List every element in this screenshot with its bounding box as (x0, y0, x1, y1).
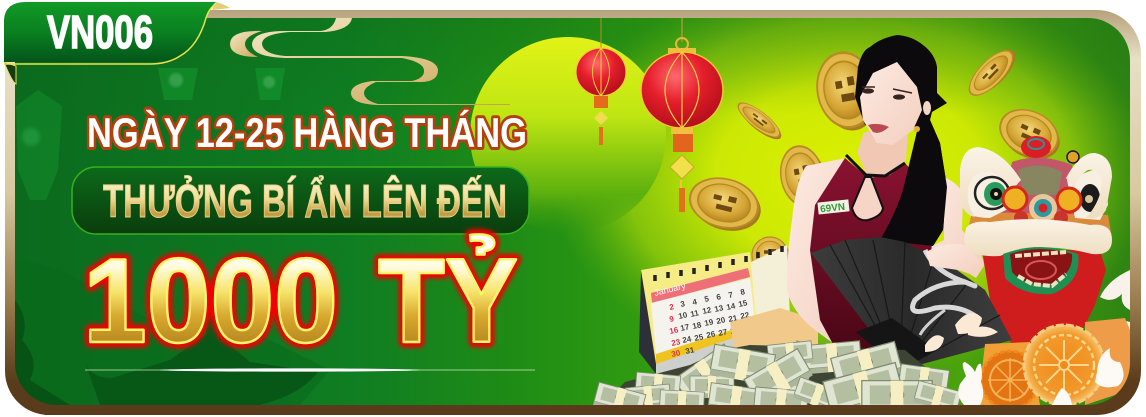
forehead floral (1000, 158, 1080, 215)
dress (810, 158, 933, 350)
left arm (787, 158, 846, 342)
desk calendar: 22 (740, 310, 751, 321)
desk calendar: January (653, 280, 687, 298)
badge 69VN (817, 199, 850, 215)
neck (857, 132, 908, 178)
right arm and hand (931, 178, 984, 278)
hair back and ponytail (855, 35, 947, 246)
gold coin top (816, 52, 866, 130)
green glowing lanterns silhouette (16, 68, 285, 200)
mooncakes (978, 318, 1130, 409)
decorative gold cloud ribbon (230, 18, 510, 105)
badge 69VN: 69VN (820, 202, 846, 215)
desk calendar: 2 (669, 302, 675, 312)
desk calendar: 15 (738, 298, 749, 309)
desk calendar: 6 (716, 292, 722, 302)
desk calendar: 14 (726, 301, 737, 312)
large red lantern (641, 18, 723, 212)
mouth (1003, 247, 1078, 294)
right horn fur (1066, 153, 1112, 218)
headline: date range: NGÀY 12-25 HÀNG THÁNG (87, 109, 527, 156)
red mane (982, 250, 1106, 352)
desk calendar (639, 245, 790, 374)
gold coin behind calendar (751, 236, 788, 262)
desk calendar: 26 (706, 329, 717, 340)
corner tab (4, 2, 230, 84)
prize amount 1000 TỶ (83, 233, 518, 368)
lion dance head (960, 136, 1112, 352)
desk calendar: 11 (690, 308, 700, 319)
subtitle pill (72, 167, 529, 234)
fur band (964, 219, 1112, 256)
yellow glow behind the model (572, 18, 1130, 344)
desk calendar: 17 (680, 322, 691, 333)
desk calendar: 9 (669, 314, 675, 324)
folding fan (811, 237, 1012, 370)
desk calendar: 7 (728, 290, 734, 300)
desk calendar: 31 (685, 345, 696, 356)
desk calendar: 16 (669, 325, 680, 336)
bottom brown band (25, 405, 1118, 415)
desk calendar: 20 (716, 315, 727, 326)
desk calendar: 21 (728, 313, 739, 324)
left horn fur (960, 147, 1021, 217)
prize amount 1000 TỶ: TỶ (378, 233, 518, 368)
ponytail over dress (880, 120, 947, 246)
white orchid flowers (1100, 270, 1130, 340)
white rabbits (958, 348, 1124, 405)
hills and pagoda silhouette (15, 300, 328, 405)
desk calendar: 4 (692, 297, 698, 307)
desk calendar: 5 (704, 294, 710, 304)
glow line under headline (85, 368, 535, 372)
gold bars box (730, 308, 818, 348)
hand on fan (926, 244, 982, 276)
gold coin behind shoulder (780, 145, 822, 204)
prize amount 1000 TỶ: 1000 (83, 234, 338, 368)
gold coin lower (688, 177, 761, 231)
keyhole neckline (852, 177, 883, 220)
desk calendar: 19 (704, 317, 715, 328)
desk calendar: 27 (718, 327, 729, 338)
desk calendar: 10 (678, 310, 689, 321)
moon (470, 37, 666, 233)
model (787, 35, 984, 352)
desk calendar: 12 (702, 305, 713, 316)
stacks of cash (593, 341, 962, 417)
desk calendar: 18 (692, 320, 703, 331)
cheek band (966, 212, 1112, 238)
eyes, brows and lips (862, 87, 931, 133)
subtitle: THƯỞNG BÍ ẨN LÊN ĐẾN (103, 175, 507, 227)
desk calendar: 24 (682, 334, 693, 345)
pompoms (1003, 136, 1081, 225)
left eye patch (960, 168, 1010, 218)
desk calendar: 29 (742, 322, 753, 333)
desk calendar: 8 (740, 287, 746, 297)
tab label: VN006 (47, 6, 153, 58)
desk calendar: 23 (671, 337, 682, 348)
gold coin flying right (968, 50, 1016, 96)
gold coin flying left (738, 102, 782, 140)
gold coin behind lion (999, 109, 1060, 158)
prize amount 1000 TỶ: TỶ (378, 233, 518, 368)
desk calendar: 25 (694, 332, 705, 343)
desk calendar: 3 (680, 299, 686, 309)
face (860, 62, 922, 145)
small red lantern (576, 18, 626, 145)
right eye patch (1067, 165, 1108, 220)
prize amount 1000 TỶ: 1000 (83, 234, 338, 368)
desk calendar: 28 (730, 325, 741, 336)
desk calendar: 30 (671, 348, 682, 359)
desk calendar: 13 (714, 303, 725, 314)
